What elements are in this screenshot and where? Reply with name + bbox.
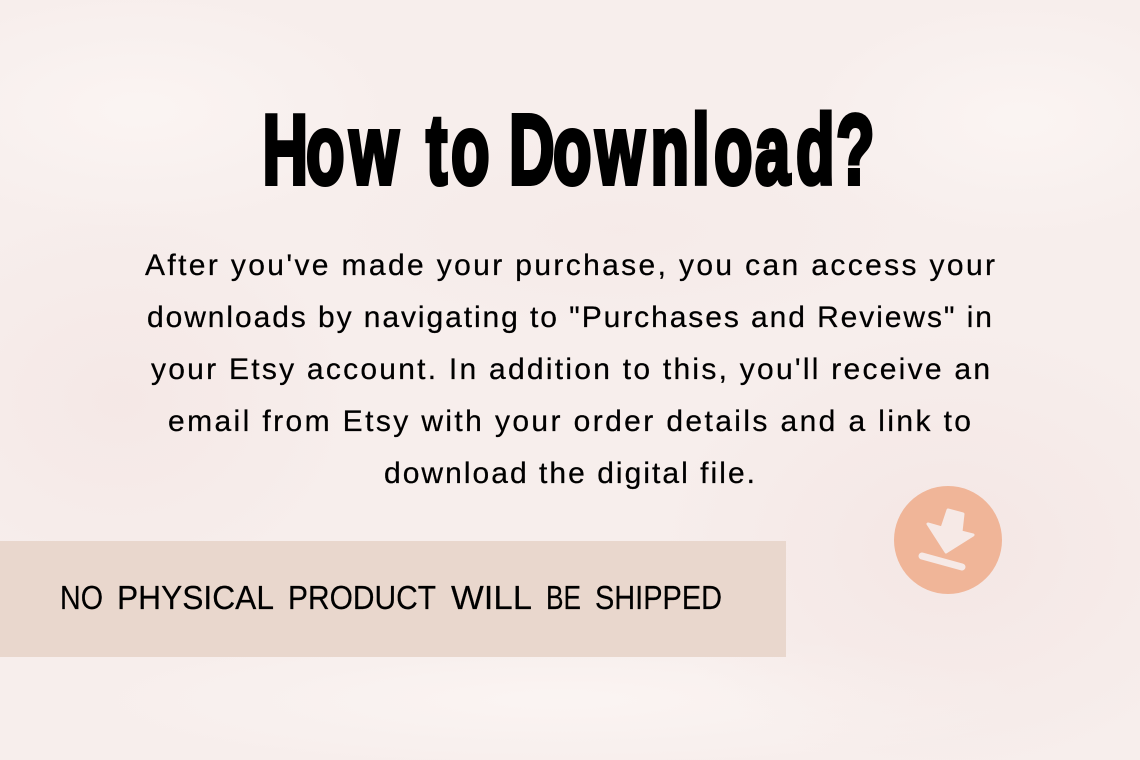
body paragraph: downloads by navigating to "Purchases and Reviews" in bbox=[147, 301, 992, 334]
banner text: BE bbox=[546, 579, 581, 616]
body paragraph: After you've made your purchase, you can access your bbox=[145, 249, 995, 282]
title: How to Download? bbox=[263, 97, 874, 205]
icon: download bbox=[894, 486, 1002, 594]
banner text: PHYSICAL bbox=[117, 579, 274, 616]
body paragraph: your Etsy account. In addition to this, you'll receive an bbox=[151, 353, 990, 386]
banner text: PRODUCT bbox=[288, 579, 436, 616]
banner bbox=[0, 541, 786, 657]
banner text: WILL bbox=[451, 579, 532, 616]
banner text: NO bbox=[60, 579, 103, 616]
body paragraph bbox=[145, 249, 995, 490]
banner text: SHIPPED bbox=[595, 579, 722, 616]
body paragraph: download the digital file. bbox=[384, 457, 755, 490]
body paragraph: email from Etsy with your order details and a link to bbox=[168, 405, 971, 438]
banner text bbox=[60, 579, 722, 616]
